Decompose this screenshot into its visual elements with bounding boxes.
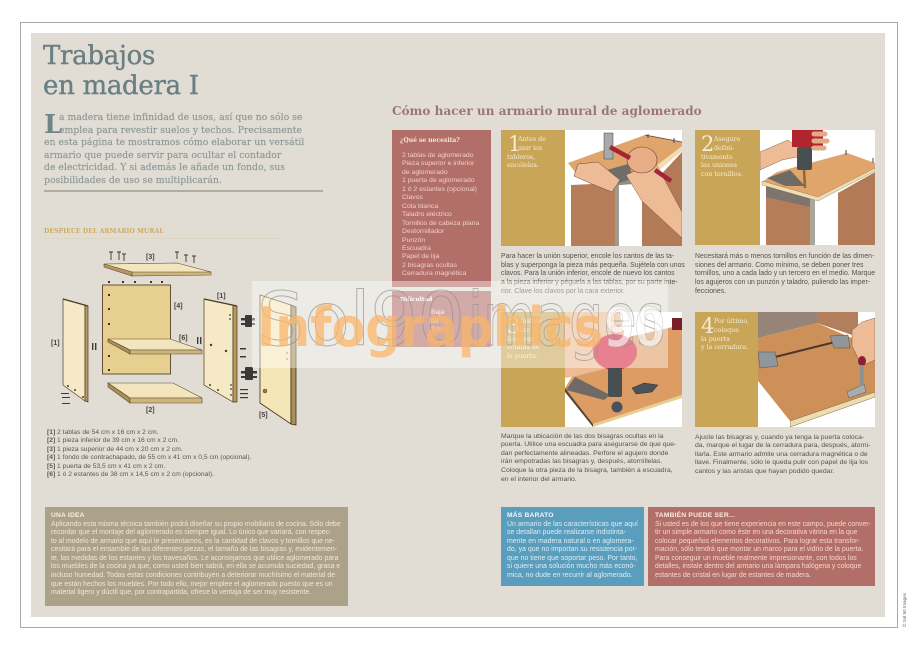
también puede ser text: colocar pequeños elementos decorativos. Para lograr esta transfor- xyxy=(655,538,860,545)
parts list xyxy=(47,429,251,478)
más barato text: mica, no dude en recurrir al aglomerado. xyxy=(507,572,633,579)
más barato text: se detallan puede realizarse indistinta- xyxy=(507,529,626,536)
illustration: drilling screws xyxy=(760,130,875,245)
part labels: [3] xyxy=(146,254,155,261)
step 2 text: fecciones. xyxy=(695,288,726,295)
materials list xyxy=(402,152,480,277)
step 2 title: defini- xyxy=(714,145,734,152)
step 4 text: Ajuste las bisagras y, cuando ya tenga la puerta coloca- xyxy=(695,434,864,440)
step 3 xyxy=(501,312,682,483)
diagram heading: DESPIECE DEL ARMARIO MURAL xyxy=(44,228,164,235)
más barato text xyxy=(507,520,638,579)
más barato text: que no tiene que soportar peso. Por tanto, xyxy=(507,555,638,562)
section heading: Cómo hacer un armario mural de aglomerado xyxy=(392,104,702,118)
materials list: Tornillos de cabeza plana xyxy=(402,220,479,227)
una idea text xyxy=(51,520,341,596)
step 3 text: irán empotradas las bisagras y, después, atorníllelas. xyxy=(501,458,662,465)
step 3 caption xyxy=(501,312,565,427)
panel: también puede ser xyxy=(648,507,875,586)
materials list: 1 puerta de aglomerado xyxy=(402,177,475,184)
watermark orange text: Infographics xyxy=(257,296,603,359)
step 2 text xyxy=(695,252,875,295)
también puede ser text xyxy=(655,520,871,579)
title: Trabajos xyxy=(43,41,155,71)
part labels: [1] xyxy=(217,293,226,300)
parts list: [1] 2 tablas de 54 cm x 16 cm x 2 cm. xyxy=(47,429,159,436)
también puede ser heading: TAMBIÉN PUEDE SER... xyxy=(655,512,735,519)
step 4 title: y la cerradura. xyxy=(701,344,748,351)
step 1 text: Para hacer la unión superior, encole los cantos de las ta- xyxy=(501,253,674,260)
step 1 title xyxy=(507,136,546,169)
illustration: fitting the door xyxy=(758,312,875,427)
dificultad value: de xyxy=(431,318,438,324)
parts list: [2] 1 pieza inferior de 39 cm x 16 cm x 2 cm. xyxy=(47,437,179,444)
title: en madera I xyxy=(43,71,199,101)
illustration: drilling the door xyxy=(565,312,682,427)
left side [1] xyxy=(63,299,88,402)
step 3 text: Marque la ubicación de las dos bisagras ocultas en la xyxy=(501,432,663,440)
step 1 title: unir los xyxy=(518,145,542,152)
top board [3] xyxy=(104,263,211,276)
materials list: Cola blanca xyxy=(402,203,438,210)
materials list: Escuadra xyxy=(402,245,431,252)
step 1 text: blas y superponga la pieza más pequeña. Sujétela con unos xyxy=(501,262,685,269)
intro paragraph xyxy=(44,112,304,186)
step 4 title xyxy=(701,318,749,351)
step 1 xyxy=(501,130,685,295)
step 4 xyxy=(695,312,875,475)
también puede ser text: estantes de cristal en lugar de estantes de madera. xyxy=(655,572,811,579)
una idea text: to al modelo de armario que aquí le presentamos, es la cantidad de clavos y tornillos que ne- xyxy=(51,538,335,545)
también puede ser text: tir un simple armario como éste en una decorativa vitrina en la que xyxy=(655,529,857,536)
door [5] xyxy=(260,295,296,425)
step 1 title: Antes de xyxy=(518,136,546,143)
una idea text: recordar que el montaje del aglomerado es siempre igual. Lo único que variará, con respec- xyxy=(51,529,331,536)
parts list: [3] 1 pieza superior de 44 cm x 20 cm x 2 cm. xyxy=(47,446,183,453)
right side [1] xyxy=(204,299,237,402)
materials list: Papel de lija xyxy=(402,253,439,260)
watermark outline text xyxy=(257,277,665,363)
step 3 title: Instale xyxy=(520,318,542,325)
panel: más barato xyxy=(501,507,644,586)
más barato text: mente en madera natural o en aglomera- xyxy=(507,538,634,545)
step 4 text: da, marque el lugar de la cerradura para, después, atorni- xyxy=(695,442,870,449)
step 2 title xyxy=(701,136,743,178)
step 2 text: Necesitará más o menos tornillos en función de las dimen- xyxy=(695,253,874,260)
también puede ser text: mación, sólo tendrá que montar un marco para el vidrio de la puerta. xyxy=(655,546,863,553)
también puede ser text: Si usted es de los que tiene experiencia en este campo, puede conver- xyxy=(655,520,871,528)
number 2: 2 xyxy=(701,132,714,156)
más barato text: Un armario de las características que aquí xyxy=(507,520,638,528)
step 1 caption xyxy=(501,130,565,246)
materials list: Punzón xyxy=(402,237,425,244)
una idea text: los muebles de la cocina ya que, como usted bien sabrá, en ella se acumula suciedad, grasa e xyxy=(51,563,340,570)
una idea text: incluso humedad. Todas estas condiciones contribuyen a deteriorar muchísimo el material de xyxy=(51,572,335,579)
step 2 text: siones del armario. Como mínimo, se deben poner tres xyxy=(695,262,864,269)
más barato heading: MÁS BARATO xyxy=(507,512,554,519)
step 1 text: a la pieza inferior y péguela a las tablas, por su parte inte- xyxy=(501,279,678,286)
materials list: Destornillador xyxy=(402,228,444,235)
step 1 title: tableros, xyxy=(507,154,535,161)
step 2 title: las uniones xyxy=(701,162,737,169)
más barato text: do, ya que no importan su resistencia por- xyxy=(507,546,637,553)
step 4 text: llave. Finalmente, sólo le queda pulir con papel de lija los xyxy=(695,459,868,466)
nails around back panel xyxy=(108,281,163,371)
step 3 text: puerta. Utilice una escuadra para asegurarse de que que- xyxy=(501,441,676,448)
step 2 title: Asegure xyxy=(714,136,740,143)
watermark xyxy=(252,281,668,368)
step 3 text: dan perfectamente alineadas. Perfore el agujero donde xyxy=(501,450,668,457)
step 2 title: tivamente xyxy=(701,154,733,161)
title xyxy=(43,41,199,101)
bottom board [2] xyxy=(108,383,202,403)
panel: qué se necesita xyxy=(392,130,491,287)
screws top xyxy=(109,252,196,263)
materials list: Taladro eléctrico xyxy=(402,211,452,218)
number 4: 4 xyxy=(701,314,714,338)
step 3 title: ocultas de xyxy=(507,344,540,351)
part labels: [5] xyxy=(259,412,268,419)
part labels: [1] xyxy=(51,340,60,347)
intro paragraph: emplea para revestir suelos y techos. Precisamente xyxy=(59,125,302,136)
side drill holes xyxy=(67,314,232,398)
materials heading: ¿Qué se necesita? xyxy=(400,136,460,144)
step 3 text xyxy=(501,432,676,483)
step 3 title: las xyxy=(520,327,529,334)
number 1: 1 xyxy=(508,132,521,156)
step 4 title: la puerta xyxy=(701,336,730,343)
drop cap: L xyxy=(44,110,62,140)
intro paragraph: de electricidad. Y si además le añade un fondo, sus xyxy=(44,162,285,173)
intro paragraph: en esta página te mostramos cómo elaborar un versátil xyxy=(44,137,304,148)
dificultad value: 2 h xyxy=(431,326,440,333)
parts list: [5] 1 puerta de 53,5 cm x 41 cm x 2 cm. xyxy=(47,463,165,470)
part labels: [6] xyxy=(179,335,188,342)
una idea text: que están hechos los muebles. Por todo ello, mejor emplee el aglomerado puesto que es un xyxy=(51,581,333,588)
step 3 title xyxy=(507,318,542,360)
number 3: 3 xyxy=(507,314,520,338)
panel: una idea xyxy=(45,507,348,606)
una idea text: material ligero y dúctil que, por contrapartida, ofrece la ventaja de ser muy resistente. xyxy=(51,589,311,596)
una idea text: te, las medidas de los estantes y los travesaños. Le aconsejamos que utilice aglomerado para xyxy=(51,555,338,562)
step 2 text: tornillos, uno a cada lado y un tercero en el medio. Marque xyxy=(695,270,875,277)
más barato text: si quiere una solución mucho más econó- xyxy=(507,563,636,570)
dificultad heading: Dificultad xyxy=(400,297,432,303)
una idea text: cesitará para el ensamble de las diferentes piezas, el tamaño de las bisagras y, evidentemen- xyxy=(51,546,337,553)
materials list: Pieza superior e inferior xyxy=(402,160,474,167)
step 4 title: coloque xyxy=(714,327,739,334)
step 1 text xyxy=(501,252,685,295)
part labels xyxy=(51,254,268,419)
step 1 text: clavos. Para la unión inferior, encole de nuevo los cantos xyxy=(501,270,675,277)
también puede ser text: detalles, instale dentro del armario una lámpara halógena y coloque xyxy=(655,563,861,570)
step 3 text: Coloque la otra pieza de la bisagra, también a escuadra, xyxy=(501,467,673,474)
part labels: [2] xyxy=(146,407,155,414)
part labels: [4] xyxy=(174,303,183,310)
dificultad value: Baja xyxy=(431,309,444,316)
step 2 xyxy=(695,130,875,295)
step 3 title: bisagras xyxy=(507,336,534,343)
step 3 title: la puerta. xyxy=(507,353,538,360)
parts list: [4] 1 fondo de contrachapado, de 55 cm x 41 cm x 0,5 cm (opcional). xyxy=(47,454,251,461)
diagram heading rule xyxy=(44,238,280,239)
step 1 text: rior. Clave los clavos por la cara exterior. xyxy=(501,288,625,295)
una idea heading: UNA IDEA xyxy=(51,512,85,519)
step 4 text: llarla. Este armario admite una cerradura magnética o de xyxy=(695,451,868,458)
parts list: [6] 1 ó 2 estantes de 38 cm x 14,5 cm x 2 cm (opcional). xyxy=(47,471,214,478)
step 4 text xyxy=(695,434,870,475)
step 2 text: los agujeros con un punzón y taladro, puliendo las imper- xyxy=(695,279,870,286)
una idea text: Aplicando esta misma técnica también podrá diseñar su propio mobiliario de cocina. Sólo debe xyxy=(51,520,341,528)
materials list: de aglomerado xyxy=(402,169,448,176)
door holes xyxy=(286,352,288,360)
también puede ser text: Para conseguir un mueble realmente impresionante, con todos los xyxy=(655,555,857,562)
materials list: Clavos xyxy=(402,194,423,201)
illustration: hammering the board xyxy=(565,130,682,246)
intro rule xyxy=(44,190,323,192)
step 3 text: en el interior del armario. xyxy=(501,476,577,483)
shelf [6] xyxy=(108,339,202,354)
step 4 text: cantos y las aristas que hayan podido quedar. xyxy=(695,468,834,475)
intro paragraph: a madera tiene infinidad de usos, así que no sólo se xyxy=(59,112,302,123)
hinges and fittings xyxy=(61,315,257,404)
materials list: 2 tablas de aglomerado xyxy=(402,152,474,159)
intro paragraph: armario que puede servir para ocultar el contador xyxy=(44,150,281,161)
step 4 title: Por último, xyxy=(714,318,749,325)
materials list: 1 ó 2 estantes (opcional) xyxy=(402,186,477,193)
materials list: 2 bisagras ocultas xyxy=(402,262,457,269)
step 1 title: encólelos. xyxy=(507,162,539,169)
step 4 caption xyxy=(695,312,758,427)
step 2 caption xyxy=(695,130,760,245)
dificultad value xyxy=(431,309,444,333)
exploded cabinet diagram xyxy=(51,252,296,426)
intro text block xyxy=(44,110,304,186)
step 2 title: con tornillos. xyxy=(701,171,743,178)
materials list: Cerradura magnética xyxy=(402,270,466,277)
back panel [4] xyxy=(102,285,170,374)
intro paragraph: posibilidades de uso se multiplicarán. xyxy=(44,175,222,186)
copyright credit: © Sol 90 Images xyxy=(902,593,907,627)
panel: dificultad xyxy=(392,291,491,347)
